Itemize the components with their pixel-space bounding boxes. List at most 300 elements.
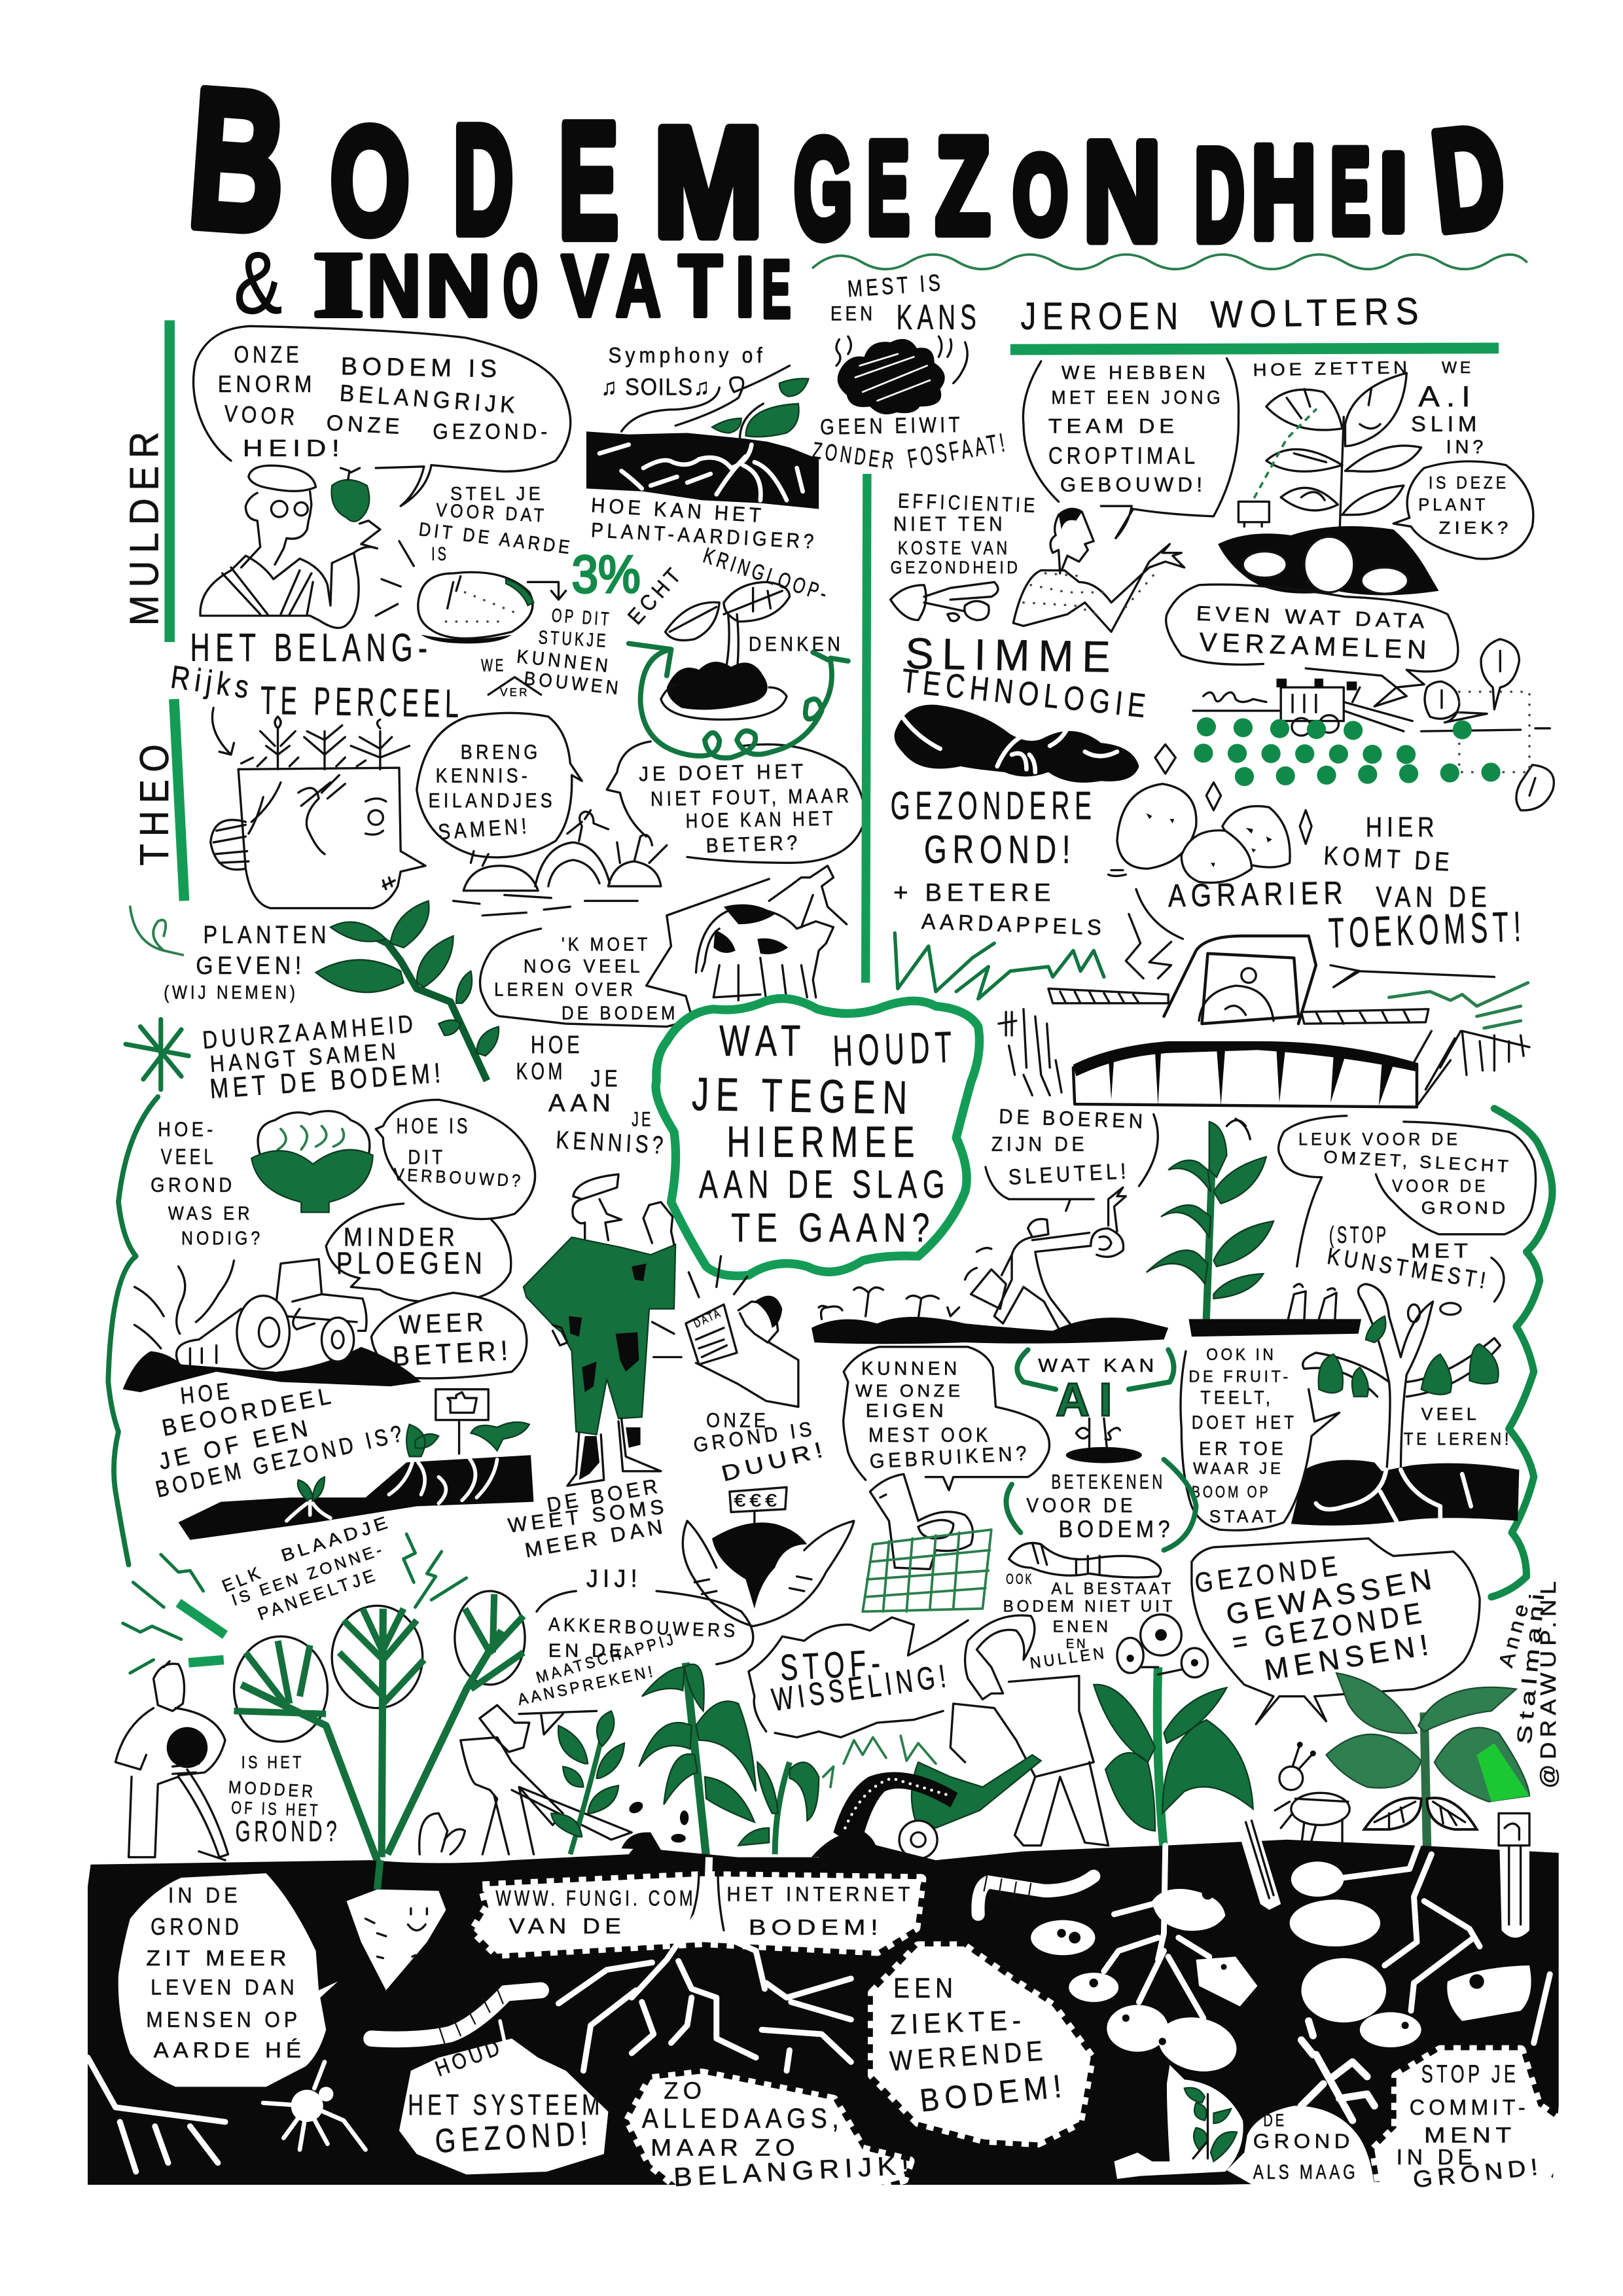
- text: onze grond is duur: DUUR!: [719, 1437, 830, 1486]
- text: op dit stukje: OP DIT: [551, 605, 612, 630]
- subtitle: & innovatie: [234, 233, 791, 336]
- illustration: plant with AI: SLIM: [1411, 412, 1481, 437]
- illustration: tractor on black ground: [123, 1259, 421, 1392]
- speech bubble: akkerbouwers: AANSPREKEN!: [516, 1662, 657, 1709]
- text: hoeveel grond: GROND: [151, 1174, 236, 1196]
- callout: wat houdt je tegen: WAT: [719, 1016, 807, 1066]
- text: stel je voor: [418, 484, 574, 565]
- text: ook al bestaat bodem: AL BESTAAT: [1051, 1580, 1174, 1598]
- bubble: houd het systeem gezond: HET SYSTEEM: [408, 2089, 604, 2121]
- bubble: een ziektewerende bodem: [873, 1946, 1091, 2142]
- panel: mest is een kans: [811, 269, 1010, 475]
- panel: duurzaamheid: [126, 1010, 446, 1104]
- subtitle: & innovatie: A: [616, 238, 661, 335]
- text: hoeveel grond: WAS ER: [168, 1203, 253, 1224]
- title: I: [1380, 132, 1406, 253]
- text: stel je voor: STEL JE: [450, 484, 544, 505]
- illustration: worm: [1009, 1543, 1161, 1577]
- speech bubble: we hebben: GEBOUWD!: [1060, 473, 1206, 496]
- text: is het modder: OF IS HET: [231, 1798, 321, 1820]
- text: agrarier van de toekomst: KOMT DE: [1323, 841, 1454, 877]
- callout: wat houdt je tegen: HOUDT: [832, 1022, 958, 1076]
- bubble: houd het systeem gezond: GEZOND!: [434, 2113, 594, 2160]
- speech bubble: breng kennis-eilandjes: KENNIS-: [436, 764, 531, 787]
- text: hoeveel grond: NODIG?: [181, 1228, 263, 1249]
- panel: echt kringloopdenken: ECHT: [624, 561, 688, 630]
- text: elk blaadje: PANEELTJE: [255, 1564, 380, 1624]
- heading: het belangrijkste perceel: Rijks: [169, 660, 256, 706]
- text: agrarier van de toekomst: VAN DE: [1376, 881, 1491, 913]
- panel: wat kan ai betekenen: [1006, 1350, 1196, 1550]
- subtitle: & innovatie: N: [367, 238, 421, 335]
- speech bubble: kunnen we onze eigen mest: WE ONZE: [855, 1381, 963, 1401]
- speech bubble: leuk voor de omzet: GROND: [1421, 1198, 1509, 1218]
- heading: het belangrijkste perceel: TE PERCEEL: [260, 677, 464, 726]
- credit signature: @DRAWUP.NL: [1537, 1577, 1561, 1789]
- illustration: flowering plant: [1094, 1615, 1253, 1850]
- speech bubble: je doet het niet fout: BETER?: [705, 831, 802, 857]
- title: G: [794, 111, 853, 267]
- speech bubble: breng kennis-eilandjes: [417, 713, 582, 857]
- text: elk blaadje: ELK: [219, 1562, 266, 1596]
- speech bubble: hoe is dit verbouwd: VERBOUWD?: [393, 1164, 524, 1191]
- illustration: black soil blob: [895, 705, 1139, 783]
- text: op dit stukje: KUNNEN: [516, 646, 613, 677]
- panel: wat kan ai betekenen: VOOR DE: [1026, 1494, 1136, 1516]
- title: E: [558, 89, 618, 272]
- subtitle: & innovatie: O: [503, 238, 538, 335]
- speech bubble: ook in de fruitteelt: ER TOE: [1199, 1439, 1287, 1460]
- speech bubble: breng kennis-eilandjes: EILANDJES: [429, 789, 556, 812]
- heading: het belangrijkste perceel: HET BELANG-: [190, 625, 433, 670]
- text: gezondere grond: [891, 783, 1106, 941]
- potatoes and roots right: [1031, 1841, 1550, 2078]
- roots under corn plant: [558, 1857, 851, 2071]
- bubble: stop je commitment: MENT: [1424, 2123, 1516, 2147]
- subtitle: & innovatie: N: [425, 238, 491, 335]
- speech bubble: weer beter: [371, 1293, 527, 1378]
- speech bubble: onze bodem: ONZE: [326, 411, 404, 439]
- text: de boer weet soms: [507, 1474, 669, 1592]
- speech bubble: we hebben: CROPTIMAL: [1048, 442, 1199, 469]
- bubble: www.fungi.com het internet van de bodem: VAN DE: [509, 1914, 626, 1939]
- speech bubble: onze bodem: HEID!: [243, 435, 345, 461]
- illustration: head pot with plants: [211, 708, 425, 908]
- illustration: large green seedling: [1326, 1673, 1529, 1850]
- text: stop met kunstmest: (STOP: [1329, 1222, 1389, 1248]
- bubble: in de grond zit meer leven: MENSEN OP: [146, 2008, 301, 2032]
- text: stop met kunstmest: KUNSTMEST!: [1325, 1243, 1491, 1295]
- illustration: person with wheelbarrow and compost: [812, 1615, 1109, 1859]
- text: hoe kom je aan je kennis: KENNIS?: [556, 1126, 668, 1160]
- bubble: een ziektewerende bodem: ZIEKTE-: [889, 2005, 1027, 2040]
- speech bubble: breng kennis-eilandjes: BRENG: [461, 741, 541, 764]
- speech bubble: ik moet nog veel leren: NOG VEEL: [524, 956, 643, 977]
- section marker: mulder: MULDER: [121, 424, 167, 626]
- speech bubble: ook in de fruitteelt: BOOM OP: [1192, 1484, 1271, 1501]
- icon: beet: [891, 582, 998, 621]
- speech bubble: gezonde gewassen: [1192, 1539, 1480, 1724]
- insect in soil: [1298, 2021, 1374, 2121]
- sprout blob in soil: [1114, 2065, 1243, 2179]
- speech bubble: de boeren zijn de sleutel: ZIJN DE: [991, 1132, 1088, 1155]
- illustration: plant with AI: HOE ZETTEN: [1253, 357, 1411, 380]
- bubble: houd het systeem gezond: HOUD: [432, 2035, 507, 2081]
- illustration: field robot with crop rows: [1193, 639, 1554, 810]
- bubble: zo alledaags maar zo belangrijk: MAAR ZO: [651, 2134, 800, 2161]
- bubble: de grond als maag: [1227, 2106, 1374, 2188]
- text: hoe kom je aan je kennis: JE: [591, 1066, 622, 1092]
- text: stel je voor: VOOR DAT: [435, 500, 548, 527]
- text: op dit stukje: VER: [500, 686, 529, 699]
- speech bubble: onze bodem: BODEM IS: [340, 353, 502, 383]
- speech bubble: stofwisseling: WISSELING!: [770, 1658, 953, 1718]
- text: op dit stukje: STUKJE: [538, 627, 609, 652]
- speech bubble: we hebben: MET EEN JONG: [1051, 387, 1224, 408]
- illustration: plant with AI: A.I: [1418, 381, 1477, 413]
- text: hoeveel grond: VEEL: [161, 1145, 217, 1170]
- subtitle: & innovatie: V: [562, 238, 608, 335]
- speech bubble: hoe is dit verbouwd: HOE IS: [396, 1115, 471, 1139]
- illustration: person with key on soil: [812, 1187, 1168, 1344]
- text: stel je voor: IS: [431, 544, 449, 565]
- text: ook al bestaat bodem: EN: [1066, 1637, 1088, 1651]
- speech bubble: ook in de fruitteelt: OOK IN: [1206, 1346, 1276, 1364]
- panel: mest is een kans: MEST IS: [847, 269, 945, 302]
- panel: wat kan ai betekenen: BETEKENEN: [1051, 1471, 1166, 1494]
- speech bubble: de boeren zijn de sleutel: SLEUTEL!: [1008, 1159, 1130, 1190]
- speech bubble: ik moet nog veel leren: DE BODEM: [562, 1003, 679, 1024]
- speech bubble: is deze plant ziek: PLANT: [1418, 495, 1488, 514]
- speech bubble: je doet het niet fout: HOE KAN HET: [685, 807, 836, 833]
- text: ook al bestaat bodem: NULLEN: [1029, 1644, 1108, 1672]
- speech bubble: onze bodem: [194, 326, 571, 506]
- text: elk blaadje: BLAADJE: [279, 1512, 393, 1566]
- speech bubble: ook in de fruitteelt: DE FRUIT-: [1188, 1368, 1291, 1386]
- panel: mest is een kans: GEEN EIWIT: [820, 413, 963, 440]
- text: stel je voor: DIT DE AARDE: [418, 519, 574, 559]
- panel: echt kringloopdenken: [624, 543, 848, 758]
- speech bubble: kunnen we onze eigen mest: [844, 1347, 1049, 1490]
- text: elk blaadje: IS EEN ZONNE-: [230, 1540, 387, 1609]
- speech bubble: is deze plant ziek: [1393, 461, 1533, 559]
- speech bubble: we hebben: TEAM DE: [1048, 414, 1179, 437]
- title: D: [454, 94, 513, 265]
- speech bubble: is deze plant ziek: IS DEZE: [1429, 473, 1509, 492]
- speech bubble: akkerbouwers: [516, 1591, 753, 1734]
- illustration: pear tree: [1291, 1284, 1519, 1526]
- panel: duurzaamheid: MET DE BODEM!: [209, 1057, 446, 1104]
- heading: het belangrijkste perceel: [169, 625, 464, 726]
- bubble: de grond als maag: ALS MAAG: [1253, 2161, 1359, 2183]
- text: onze grond is duur: GROND IS: [692, 1417, 817, 1457]
- speech bubble: de boeren zijn de sleutel: DE BOEREN: [999, 1105, 1147, 1133]
- heading: jeroen wolters: WOLTERS: [1210, 290, 1426, 336]
- illustration: harvester machine: [999, 936, 1529, 1107]
- text: gezondere grond: + BETERE: [893, 879, 1056, 906]
- text: op dit stukje: [481, 605, 622, 699]
- panel: planten geven: (WIJ NEMEN): [164, 982, 298, 1003]
- speech bubble: breng kennis-eilandjes: SAMEN!: [437, 814, 531, 845]
- illustration: hands holding soil: [683, 1487, 854, 1626]
- text: ook al bestaat bodem: ENEN: [1053, 1619, 1111, 1636]
- illustration: plant with AI: IN?: [1446, 437, 1487, 458]
- section marker: theo: THEO: [132, 737, 177, 866]
- title: M: [654, 96, 763, 269]
- title: O: [330, 96, 410, 264]
- title: E: [867, 115, 910, 260]
- text: gezondere grond: GROND!: [924, 827, 1076, 871]
- bubble: een ziektewerende bodem: EEN: [893, 1973, 957, 2003]
- panel: mest is een kans: FOSFAAT!: [905, 427, 1010, 474]
- speech bubble: ik moet nog veel leren: 'K MOET: [562, 934, 651, 955]
- illustration: person reading data: DATA: [692, 1306, 724, 1330]
- illustration: farmer with apple: [200, 465, 380, 628]
- title: H: [1252, 120, 1316, 265]
- illustration: person with soil ball: [116, 1661, 228, 1860]
- speech bubble: akkerbouwers: MAATSCHAPPIJ: [534, 1630, 678, 1687]
- panel: planten geven: [130, 901, 499, 1081]
- bubble: zo alledaags maar zo belangrijk: ZO: [664, 2077, 706, 2104]
- text: stop met kunstmest: MET: [1411, 1240, 1472, 1263]
- text: de boer weet soms: MEER DAN: [523, 1515, 668, 1562]
- heading: slimme technologie: TECHNOLOGIE: [900, 661, 1152, 725]
- panel: symphony of soils: [586, 344, 819, 553]
- title: N: [1084, 114, 1161, 270]
- subtitle: & innovatie: T: [679, 238, 722, 335]
- speech bubble: weer beter: WEER: [399, 1307, 488, 1340]
- callout: wat houdt je tegen: HIERMEE: [726, 1117, 921, 1166]
- heading: slimme technologie: [900, 629, 1152, 725]
- subtitle: & innovatie: E: [762, 243, 791, 335]
- panel: planten geven: GEVEN!: [196, 952, 306, 980]
- bubble: een ziektewerende bodem: BODEM!: [918, 2068, 1069, 2119]
- callout: wat houdt je tegen: AAN DE SLAG: [699, 1162, 950, 1206]
- speech bubble: kunnen we onze eigen mest: EIGEN: [866, 1401, 948, 1422]
- panel: wat kan ai betekenen: AI: [1056, 1374, 1122, 1426]
- text: hoeveel grond: [151, 1118, 263, 1249]
- panel: planten geven: PLANTEN: [204, 922, 330, 949]
- illustration: cow and farmer: [696, 866, 847, 1000]
- illustration: plant with AI: WE: [1442, 359, 1474, 377]
- speech bubble: kunnen we onze eigen mest: KUNNEN: [861, 1358, 961, 1379]
- title: O: [1013, 133, 1067, 256]
- speech bubble: minder ploegen: [326, 1204, 511, 1302]
- illustration: speaker jeroen: [1013, 508, 1185, 632]
- text: is het modder: GROND?: [236, 1816, 341, 1848]
- speech bubble: akkerbouwers: AKKERBOUWERS: [548, 1614, 739, 1641]
- bubble: stop je commitment: COMMIT-: [1410, 2096, 1529, 2120]
- speech bubble: leuk voor de omzet: OMZET, SLECHT: [1323, 1147, 1512, 1176]
- speech bubble: onze bodem: BELANGRIJK: [339, 380, 520, 418]
- bubble: stop je commitment: IN DE: [1397, 2145, 1477, 2170]
- text: op dit stukje: WE: [481, 656, 506, 675]
- bubble: in de grond zit meer leven: GROND: [151, 1914, 243, 1940]
- illustration: pear tree: TE LEREN!: [1404, 1429, 1512, 1449]
- speech bubble: stofwisseling: STOF-: [779, 1641, 886, 1688]
- speech bubble: hoe is dit verbouwd: [376, 1100, 535, 1219]
- text: hoe kom je aan je kennis: [516, 1031, 668, 1160]
- bubble: www.fungi.com het internet van de bodem: BODEM!: [749, 1916, 883, 1940]
- right green bracket: [1491, 1109, 1552, 1597]
- text: hoe beoordeel: JE OF EEN: [156, 1414, 315, 1475]
- text: is het modder: IS HET: [241, 1752, 304, 1772]
- credit signature: [1494, 1577, 1561, 1789]
- illustration: tall green plant: [1147, 1119, 1361, 1336]
- text: onze grond is duur: [692, 1409, 830, 1486]
- bubble: zo alledaags maar zo belangrijk: BELANGRIJK!: [673, 2150, 916, 2192]
- text: agrarier van de toekomst: [1136, 812, 1527, 957]
- speech bubble: onze bodem: VOOR: [223, 401, 299, 431]
- bubble: in de grond zit meer leven: [118, 1873, 338, 2087]
- left green bracket: [108, 1097, 158, 1565]
- text: gezondere grond: AARDAPPELS: [921, 910, 1106, 941]
- text: hoe beoordeel: BEOORDEEL: [160, 1382, 337, 1441]
- speech bubble: gezonde gewassen: GEWASSEN: [1224, 1562, 1440, 1631]
- illustration: plant with AI: [1218, 357, 1487, 595]
- panel: symphony of soils: HOE KAN HET: [590, 493, 766, 527]
- bubble: zo alledaags maar zo belangrijk: [629, 2073, 916, 2193]
- illustration: globe with 3 percent: [376, 541, 641, 643]
- speech bubble: ik moet nog veel leren: LEREN OVER: [494, 980, 636, 1001]
- text: agrarier van de toekomst: HIER: [1366, 812, 1438, 842]
- illustration: potatoes: [1109, 784, 1290, 883]
- center divider: [866, 474, 867, 983]
- speech bubble: even wat data: [1166, 584, 1458, 706]
- text: onze grond is duur: ONZE: [706, 1409, 769, 1432]
- speech bubble: ook in de fruitteelt: STAAT: [1209, 1507, 1279, 1526]
- illustration: carrot: [347, 1860, 446, 1990]
- illustration: toilet on green grid: [863, 1474, 991, 1611]
- speech bubble: gezonde gewassen: GEZONDE: [1193, 1550, 1344, 1598]
- subtitle: & innovatie: I: [736, 240, 755, 334]
- illustration: islands with figure: [454, 810, 667, 916]
- speech bubble: gezonde gewassen: = GEZONDE: [1230, 1596, 1429, 1659]
- bubble: de grond als maag: GROND: [1253, 2130, 1354, 2153]
- speech bubble: kunnen we onze eigen mest: MEST OOK: [868, 1424, 991, 1446]
- text: is het modder: MODDER: [228, 1777, 317, 1801]
- sparkles: [1155, 744, 1311, 844]
- speech bubble: hoe is dit verbouwd: DIT: [408, 1146, 446, 1169]
- speech bubble: ook in de fruitteelt: DOET HET: [1192, 1412, 1297, 1433]
- bubble: in de grond zit meer leven: LEVEN DAN: [151, 1976, 298, 2000]
- speech bubble: gezonde gewassen: MENSEN!: [1262, 1628, 1436, 1687]
- text: stop met kunstmest: [1325, 1222, 1504, 1302]
- text: hoe kom je aan je kennis: HOE: [531, 1031, 583, 1059]
- illustration: person reading data: [686, 1296, 798, 1407]
- heading: jeroen wolters: JEROEN: [1020, 295, 1185, 338]
- panel: echt kringloopdenken: DENKEN: [749, 632, 844, 655]
- title: B: [183, 46, 293, 274]
- bubble: www.fungi.com het internet van de bodem: WWW. FUNGI. COM: [495, 1886, 696, 1910]
- speech bubble: onze bodem: ONZE: [234, 342, 302, 368]
- bubble: www.fungi.com het internet van de bodem: [474, 1876, 921, 1954]
- illustration: person with shovel and plants: [419, 1705, 688, 1854]
- text: ook al bestaat bodem: BODEM NIET UIT: [1003, 1598, 1175, 1615]
- illustration: globe with 3 percent: 3%: [572, 545, 641, 604]
- speech bubble: kunnen we onze eigen mest: GEBRUIKEN?: [869, 1441, 1031, 1473]
- text: hoe beoordeel: HOE: [179, 1378, 234, 1409]
- title: D: [1194, 123, 1244, 268]
- text: hoe kom je aan je kennis: JE: [632, 1107, 654, 1130]
- heading: jeroen wolters: [1010, 290, 1499, 350]
- panel: mest is een kans: ZONDER: [811, 437, 899, 475]
- illustration: three leaf plant: [234, 1591, 525, 1865]
- text: op dit stukje: BOUWEN: [523, 668, 622, 699]
- panel: mest is een kans: KANS: [897, 298, 981, 337]
- soil background: [88, 1840, 1559, 2185]
- speech bubble: de boeren zijn de sleutel: [986, 1105, 1158, 1211]
- speech bubble: ook in de fruitteelt: WAAR JE: [1193, 1460, 1284, 1478]
- text: de boer weet soms: WEET SOMS: [507, 1495, 669, 1537]
- speech bubble: is deze plant ziek: ZIEK?: [1438, 518, 1512, 538]
- illustration: black soil with roots and sign: [179, 1390, 533, 1540]
- panel: duurzaamheid: DUURZAAMHEID: [202, 1010, 418, 1054]
- bubble: een ziektewerende bodem: WERENDE: [889, 2035, 1048, 2077]
- illustration: corn plants: [639, 1662, 819, 1857]
- bubble: in de grond zit meer leven: AARDE HÉ: [154, 2039, 306, 2063]
- speech bubble: even wat data: EVEN WAT DATA: [1196, 601, 1429, 633]
- title: E: [1330, 124, 1370, 258]
- speech bubble: ook in de fruitteelt: TEELT,: [1200, 1388, 1274, 1408]
- text: agrarier van de toekomst: AGRARIER: [1168, 876, 1348, 914]
- panel: wat kan ai betekenen: WAT KAN: [1038, 1355, 1158, 1376]
- speech bubble: je doet het niet fout: NIET FOUT, MAAR: [651, 784, 853, 810]
- speech bubble: weer beter: BETER!: [392, 1335, 513, 1372]
- speech bubble: stofwisseling: [749, 1617, 968, 1737]
- callout: wat houdt je tegen: JE TEGEN: [692, 1068, 914, 1124]
- text: hoe kom je aan je kennis: KOM: [516, 1058, 566, 1085]
- heading: slimme technologie: SLIMME: [905, 629, 1119, 682]
- text: hoe beoordeel: BODEM GEZOND IS?: [153, 1420, 408, 1503]
- bubble: in de grond zit meer leven: IN DE: [168, 1884, 241, 1908]
- wave divider: [813, 255, 1527, 269]
- panel: wat kan ai betekenen: BODEM?: [1059, 1516, 1174, 1542]
- panel: symphony of soils: PLANT-AARDIGER?: [590, 518, 818, 553]
- speech bubble: ook in de fruitteelt: [1181, 1346, 1340, 1530]
- bubble: de grond als maag: DE: [1263, 2111, 1287, 2130]
- text: de boer weet soms: JIJ!: [586, 1565, 642, 1592]
- test tubes: [1236, 1814, 1529, 1937]
- title: Z: [936, 110, 990, 262]
- bubble: stop je commitment: STOP JE: [1421, 2061, 1519, 2089]
- subtitle: & innovatie: &: [234, 234, 282, 332]
- speech bubble: akkerbouwers: EN DE: [548, 1641, 626, 1662]
- speech bubble: minder ploegen: PLOEGEN: [336, 1246, 487, 1280]
- text: efficientie: EFFICIENTIE: [898, 489, 1039, 517]
- bubble: www.fungi.com het internet van de bodem: HET INTERNET: [726, 1883, 914, 1906]
- bubble: houd het systeem gezond: [399, 2021, 608, 2174]
- text: ook al bestaat bodem: OOK: [1006, 1571, 1034, 1587]
- illustration: cauliflower: [251, 1111, 373, 1212]
- text: efficientie: KOSTE VAN: [898, 538, 1010, 559]
- green rays around leaves: [123, 1534, 467, 1673]
- illustration: pear tree: VEEL: [1421, 1405, 1480, 1424]
- text: gezondere grond: GEZONDERE: [891, 783, 1097, 827]
- credit signature: Stalmani: [1512, 1587, 1549, 1745]
- text: efficientie: NIET TEN: [893, 512, 1006, 535]
- speech bubble: even wat data: VERZAMELEN: [1199, 627, 1432, 665]
- title: [183, 46, 1512, 274]
- illustration: hands holding soil: €€€: [734, 1490, 781, 1510]
- bubble: zo alledaags maar zo belangrijk: ALLEDAAGS,: [642, 2103, 844, 2134]
- speech bubble: leuk voor de omzet: [1279, 1116, 1536, 1266]
- illustration: green zigzag wind: [895, 914, 1171, 999]
- bubble: in de grond zit meer leven: ZIT MEER: [146, 1946, 291, 1971]
- illustration: green farmer standing: [524, 1174, 747, 1486]
- speech bubble: we hebben: WE HEBBEN: [1061, 363, 1209, 384]
- speech bubble: onze bodem: ENORM: [218, 371, 316, 397]
